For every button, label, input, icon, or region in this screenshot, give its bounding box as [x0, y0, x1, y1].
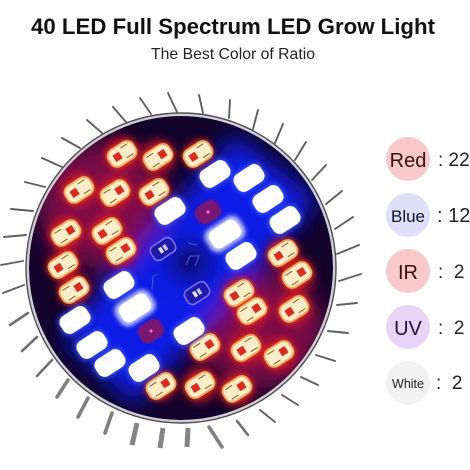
- dark lamp face with coloured glow: [29, 116, 333, 420]
- legend: white: White: [392, 377, 424, 391]
- legend: UV: [386, 305, 464, 349]
- red LEDs: [44, 136, 316, 407]
- metal rim: [26, 113, 336, 423]
- subtitle: The Best Color of Ratio: [151, 46, 315, 63]
- title: 40 LED Full Spectrum LED Grow Light: [31, 14, 435, 39]
- blue LEDs: [54, 154, 306, 388]
- legend: UV: : 2: [438, 318, 464, 339]
- legend: red: Red: [390, 150, 426, 172]
- legend: blue: [386, 193, 470, 237]
- white LEDs: [111, 212, 249, 330]
- legend: blue: Blue: [391, 207, 425, 226]
- red LED glow: [48, 137, 314, 406]
- IR LEDs: [135, 197, 224, 346]
- legend: red: [386, 137, 470, 181]
- legend: white: : 2: [436, 373, 462, 394]
- heat sink fins: [1, 93, 361, 448]
- legend: red: : 22: [438, 150, 470, 171]
- legend: white: [386, 361, 462, 405]
- legend: IR: [386, 249, 464, 293]
- legend: blue: : 12: [437, 205, 470, 227]
- legend: IR: IR: [398, 262, 418, 284]
- legend: IR: : 2: [438, 262, 464, 283]
- legend: [386, 137, 470, 405]
- UV LEDs: [148, 235, 212, 307]
- legend: UV: UV: [394, 318, 423, 340]
- LED grow light bulb: [1, 93, 361, 448]
